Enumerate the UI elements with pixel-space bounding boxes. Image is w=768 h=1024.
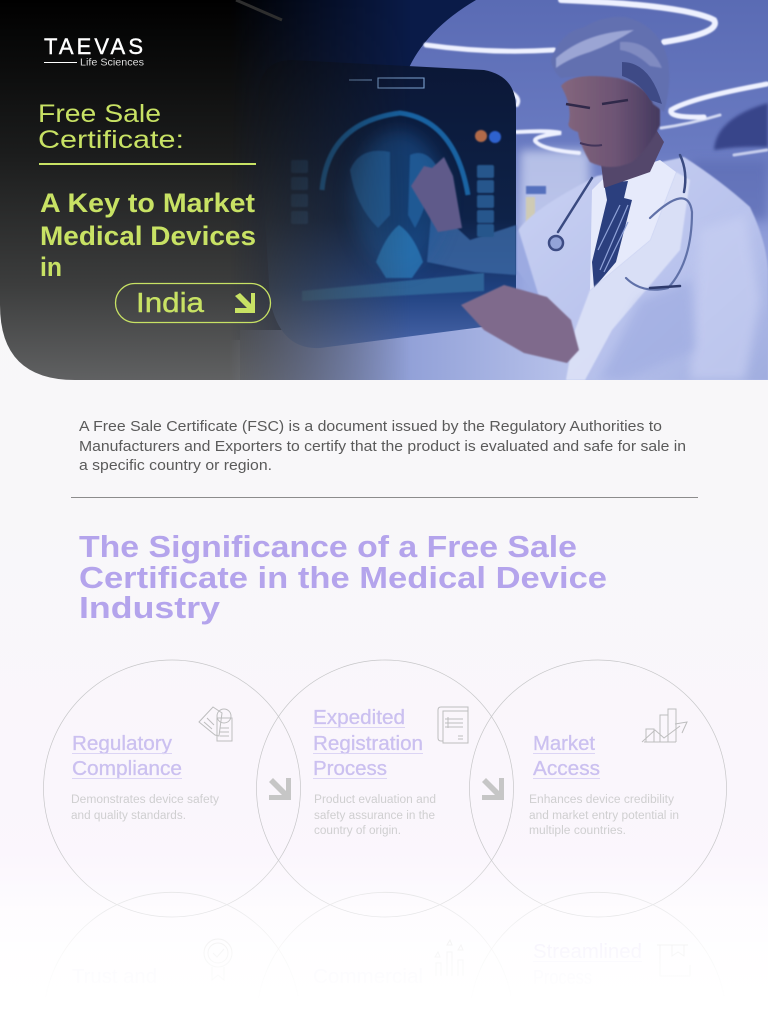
hospital corridor background (200, 0, 768, 380)
India pill with arrow: India (136, 287, 204, 318)
circle: Trust and Credibility (faded): Trust and (72, 966, 157, 988)
circle: Market Access: Market (533, 733, 595, 755)
circle: Expedited Registration Process (256, 660, 514, 917)
section heading: Certificate in the Medical Device (79, 560, 607, 595)
circle: Expedited Registration Process: Product evaluation and (314, 794, 436, 806)
circle: Regulatory Compliance: and quality standards. (71, 810, 186, 822)
circle: Expedited Registration Process: country of origin. (314, 825, 401, 837)
circle: Market Access: and market entry potential in (529, 810, 679, 822)
hero panel: doctor with holographic tablet (0, 0, 768, 380)
section heading: Industry (79, 590, 221, 625)
hero title: Medical Devices (40, 221, 256, 251)
circle: Market Access (470, 660, 726, 917)
intro paragraph (79, 419, 686, 474)
circle: Commercial (faded) (258, 892, 512, 1000)
arrow: step one to two (269, 778, 291, 800)
circle: Expedited Registration Process: Process (313, 758, 387, 780)
circle: Streamlined Process (faded): Process (533, 967, 592, 989)
icon: document (438, 707, 468, 743)
hero title (38, 100, 256, 282)
hero title: Free Sale (38, 100, 161, 128)
circle: Regulatory Compliance: Demonstrates device safety (71, 794, 219, 806)
intro paragraph: a specific country or region. (79, 458, 272, 474)
hero title: Certificate: (38, 126, 184, 154)
circle: Expedited Registration Process: Registration (313, 733, 423, 755)
circle: Streamlined Process (faded) (471, 892, 725, 1000)
icon: growth chart (642, 709, 687, 742)
icon: compliance tags (199, 707, 232, 741)
circle: Regulatory Compliance (44, 660, 300, 917)
circle: Market Access: Enhances device credibility (529, 794, 674, 806)
circle: Market Access: Access (533, 758, 600, 780)
circle: Trust and Credibility (faded) (45, 892, 299, 1000)
logo: TAEVAS (44, 34, 143, 59)
India pill with arrow (116, 284, 270, 322)
circle: Expedited Registration Process: Expedited (313, 707, 405, 729)
intro paragraph: A Free Sale Certificate (FSC) is a document issued by the Regulatory Authorities to (79, 419, 662, 435)
dark strap at top of hero (236, 0, 282, 20)
lower hand (461, 285, 579, 363)
intro paragraph: Manufacturers and Exporters to certify that the product is evaluated and safe for sale in (79, 439, 686, 455)
tablet with anatomy hologram (258, 60, 516, 348)
logo: Life Sciences (80, 58, 144, 68)
icon: certified badge (204, 939, 232, 980)
arrow: step two to three (482, 778, 504, 800)
bottom fade (0, 850, 768, 1000)
circle: Streamlined Process (faded): Streamlined (533, 941, 642, 963)
section heading (79, 529, 607, 625)
circle: Commercial (faded): Commercial (313, 966, 423, 988)
hero title: in (40, 252, 62, 282)
icon: approval document (657, 945, 690, 976)
doctor figure (516, 29, 768, 380)
circle: Regulatory Compliance: Compliance (72, 758, 182, 780)
circle: Market Access: multiple countries. (529, 825, 626, 837)
section heading: The Significance of a Free Sale (79, 529, 577, 564)
circle: Expedited Registration Process: safety assurance in the (314, 810, 435, 822)
dark gradient overlay (0, 0, 410, 380)
icon: rating bars (435, 940, 463, 976)
circle: Regulatory Compliance: Regulatory (72, 733, 172, 755)
hero title: A Key to Market (40, 188, 255, 218)
